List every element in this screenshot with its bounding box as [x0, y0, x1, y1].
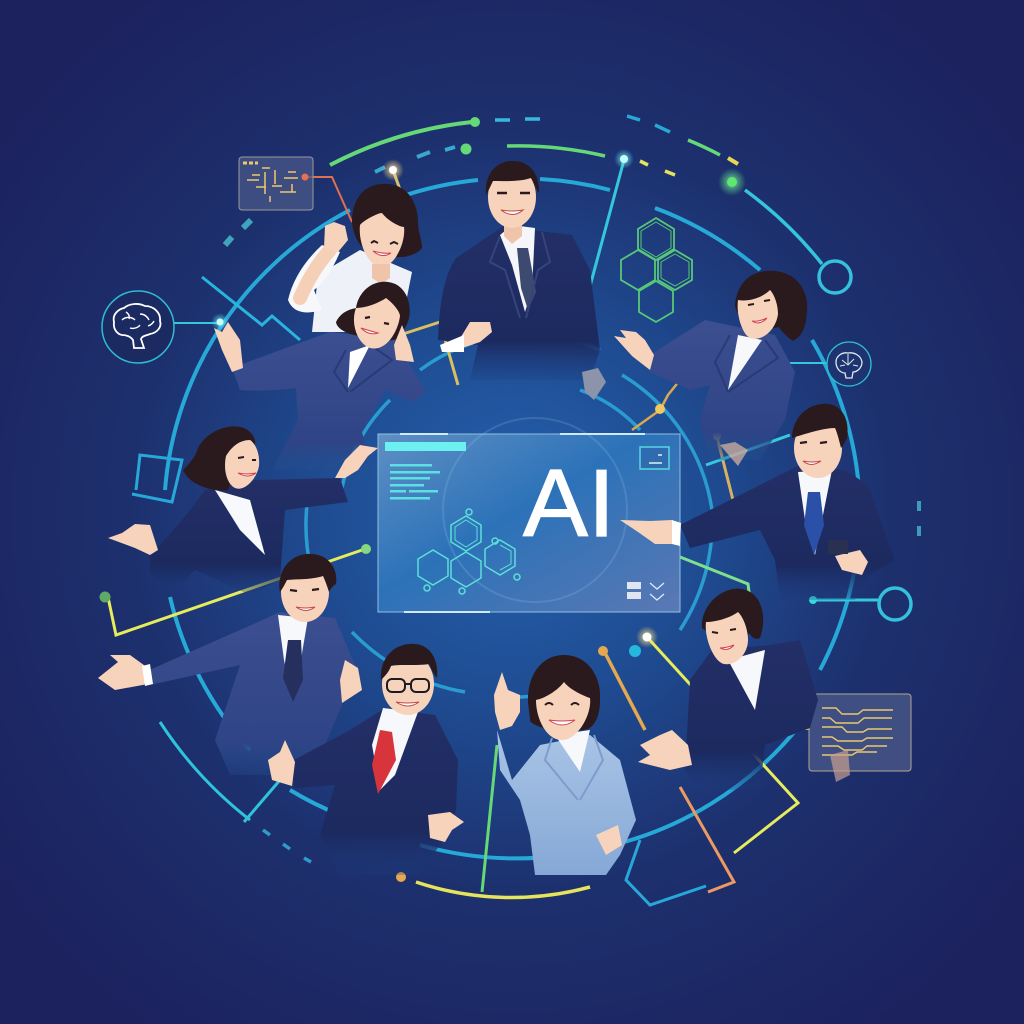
panel: AI glass screen — [378, 418, 680, 612]
mini window icon — [640, 447, 669, 469]
person: woman in light blue suit — [494, 655, 636, 875]
person: right man pointing — [620, 404, 895, 600]
orbital rings and circuit lines — [108, 116, 919, 905]
chip: circuit top left — [239, 157, 313, 210]
icon: brain circle left — [102, 291, 174, 363]
person: right woman — [614, 271, 807, 466]
person: top centre man — [438, 161, 606, 400]
person: woman in blue suit — [214, 282, 426, 470]
ring end nodes — [100, 117, 911, 882]
molecule diagram — [418, 509, 520, 594]
icon: hexagon molecule — [621, 218, 692, 322]
person: woman in white shirt — [288, 184, 422, 332]
heading: AI: AI — [523, 450, 615, 557]
controls — [627, 582, 664, 600]
person: lower right woman — [638, 589, 850, 790]
person: left man — [98, 554, 362, 775]
title bar — [385, 442, 466, 451]
person: man with glasses and red tie — [268, 644, 464, 875]
chip: circuit bottom right — [748, 694, 911, 771]
dashed accents — [495, 119, 540, 120]
icon: brain circle right — [827, 342, 871, 386]
text lines — [390, 464, 440, 500]
person: left woman — [108, 426, 378, 595]
